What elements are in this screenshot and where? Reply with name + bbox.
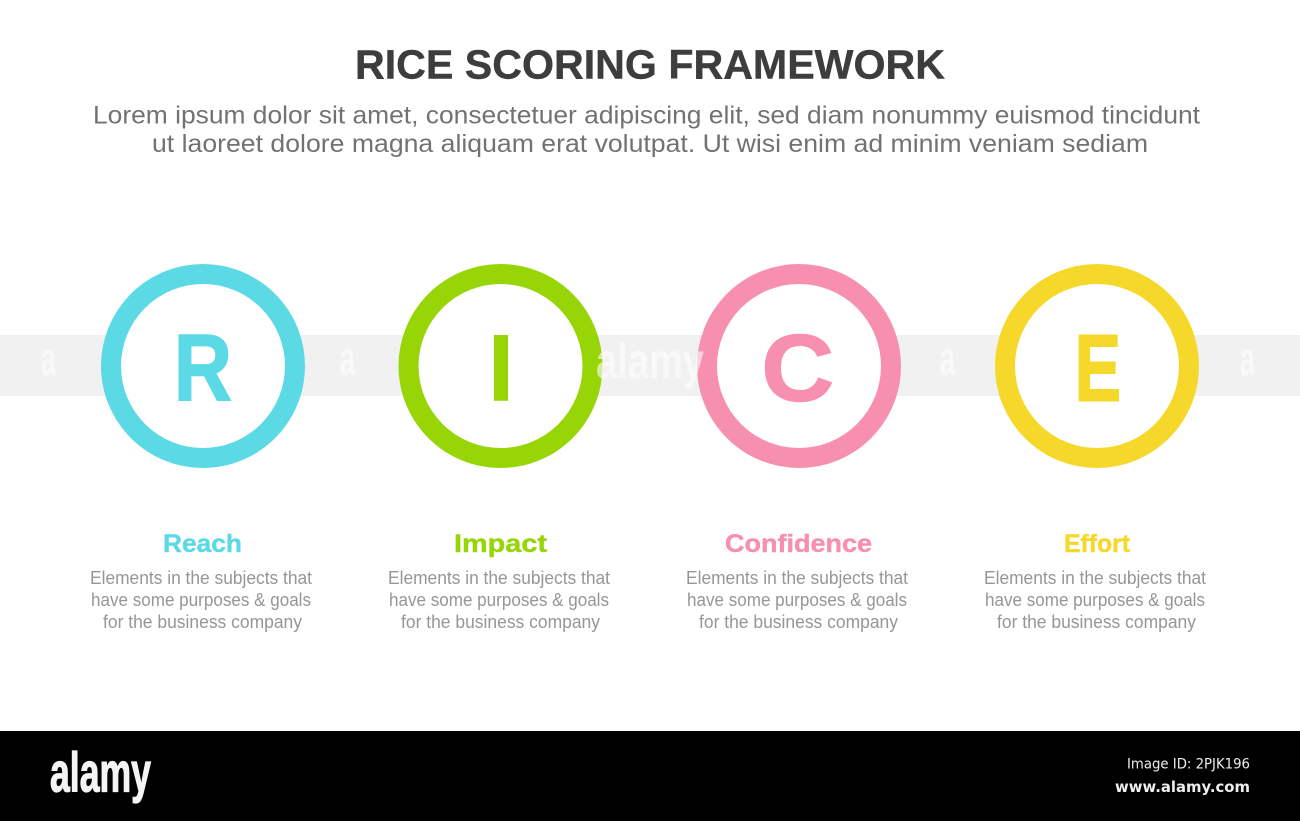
circle: R	[111, 274, 295, 458]
column: Confidence	[686, 530, 908, 632]
column: Effort: Effort	[1064, 530, 1131, 558]
centre watermark: alamy	[596, 333, 704, 389]
column: Confidence: Confidence	[725, 530, 872, 558]
circle: C	[707, 274, 891, 458]
image id and site: www.alamy.com	[1115, 778, 1250, 796]
column: Effort: for the business company	[997, 612, 1196, 632]
circle: E: E	[1075, 315, 1121, 421]
circle: C: C	[762, 315, 834, 421]
column: Impact: Elements in the subjects that	[388, 568, 610, 588]
circle: R: R	[174, 314, 232, 421]
column: Confidence: Elements in the subjects that	[686, 568, 908, 588]
column: Impact: for the business company	[401, 612, 600, 632]
watermark band: a	[41, 333, 56, 386]
column: Reach: Elements in the subjects that	[90, 568, 312, 588]
column: Reach: Reach	[163, 530, 242, 558]
footer logo: alamy	[50, 740, 151, 804]
image id and site: Image ID: 2PJK196	[1127, 756, 1250, 772]
circle: I: I	[488, 316, 514, 422]
watermark band: a	[1240, 333, 1255, 386]
subtitle text block: ut laoreet dolore magna aliquam erat volutpat. Ut wisi enim ad minim veniam sediam	[152, 130, 1148, 158]
column: Effort: have some purposes & goals	[985, 590, 1205, 610]
circle: I	[408, 274, 592, 458]
subtitle text block: Lorem ipsum dolor sit amet, consectetuer adipiscing elit, sed diam nonummy euismod tincidunt	[93, 102, 1200, 130]
column: Confidence: have some purposes & goals	[687, 590, 907, 610]
column: Effort	[984, 530, 1206, 632]
circle: E	[1005, 274, 1189, 458]
column: Reach	[90, 530, 312, 632]
watermark band: a	[940, 333, 955, 386]
column: Reach: for the business company	[103, 612, 302, 632]
column: Impact	[388, 530, 610, 632]
column: Effort: Elements in the subjects that	[984, 568, 1206, 588]
subtitle text block	[93, 102, 1200, 158]
watermark band: a	[340, 333, 355, 386]
column: Impact: Impact	[454, 530, 548, 558]
image id and site	[1115, 756, 1250, 796]
watermark band	[0, 333, 1300, 396]
footer bar	[0, 731, 1300, 821]
column: Reach: have some purposes & goals	[91, 590, 311, 610]
title: RICE SCORING FRAMEWORK	[355, 42, 945, 88]
column: Impact: have some purposes & goals	[389, 590, 609, 610]
column: Confidence: for the business company	[699, 612, 898, 632]
